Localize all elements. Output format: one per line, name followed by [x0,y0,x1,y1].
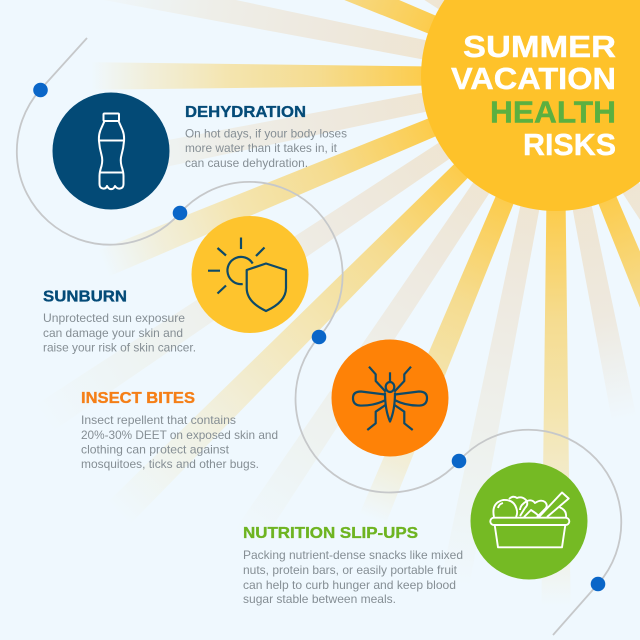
text: insect bites: Insect repellent that contains [81,413,236,427]
icon: water bottle [52,92,170,210]
icon: salad bowl [470,462,588,580]
text: insect bites [81,413,278,471]
text: sunburn [43,311,196,354]
text: insect bites: 20%-30% DEET on exposed skin and [81,428,278,442]
text: dehydration: can cause dehydration. [185,156,308,170]
text: nutrition slip-ups: Packing nutrient-dense snacks like mixed [243,548,463,562]
title: HEALTH [490,94,616,130]
text: dehydration [185,126,347,170]
title: RISKS [523,127,616,162]
text: insect bites: clothing can protect against [81,442,230,456]
icon: mosquito [332,340,448,456]
text: nutrition slip-ups: can help to curb hunger and keep blood [243,578,456,592]
heading: insect bites: INSECT BITES [81,390,195,407]
text: insect bites: mosquitoes, ticks and other bugs. [81,457,259,471]
text: dehydration: On hot days, if your body loses [185,126,347,140]
text: dehydration: more water than it takes in, it [185,141,338,155]
text: nutrition slip-ups: sugar stable between meals. [243,592,396,606]
title: SUMMER [463,29,616,64]
heading: sunburn: SUNBURN [43,288,127,306]
heading: dehydration: DEHYDRATION [185,104,306,121]
text: sunburn: Unprotected sun exposure [43,311,185,325]
icon: sun and shield [192,216,308,333]
sun [421,0,640,211]
path dots [33,83,605,591]
title: VACATION [451,61,616,96]
text: sunburn: raise your risk of skin cancer. [43,340,196,354]
heading: nutrition slip-ups: NUTRITION SLIP-UPS [243,525,418,542]
text: nutrition slip-ups [243,548,463,606]
text: sunburn: can damage your skin and [43,326,183,340]
title [451,29,616,162]
text: nutrition slip-ups: nuts, protein bars, or easily portable fruit [243,563,458,577]
